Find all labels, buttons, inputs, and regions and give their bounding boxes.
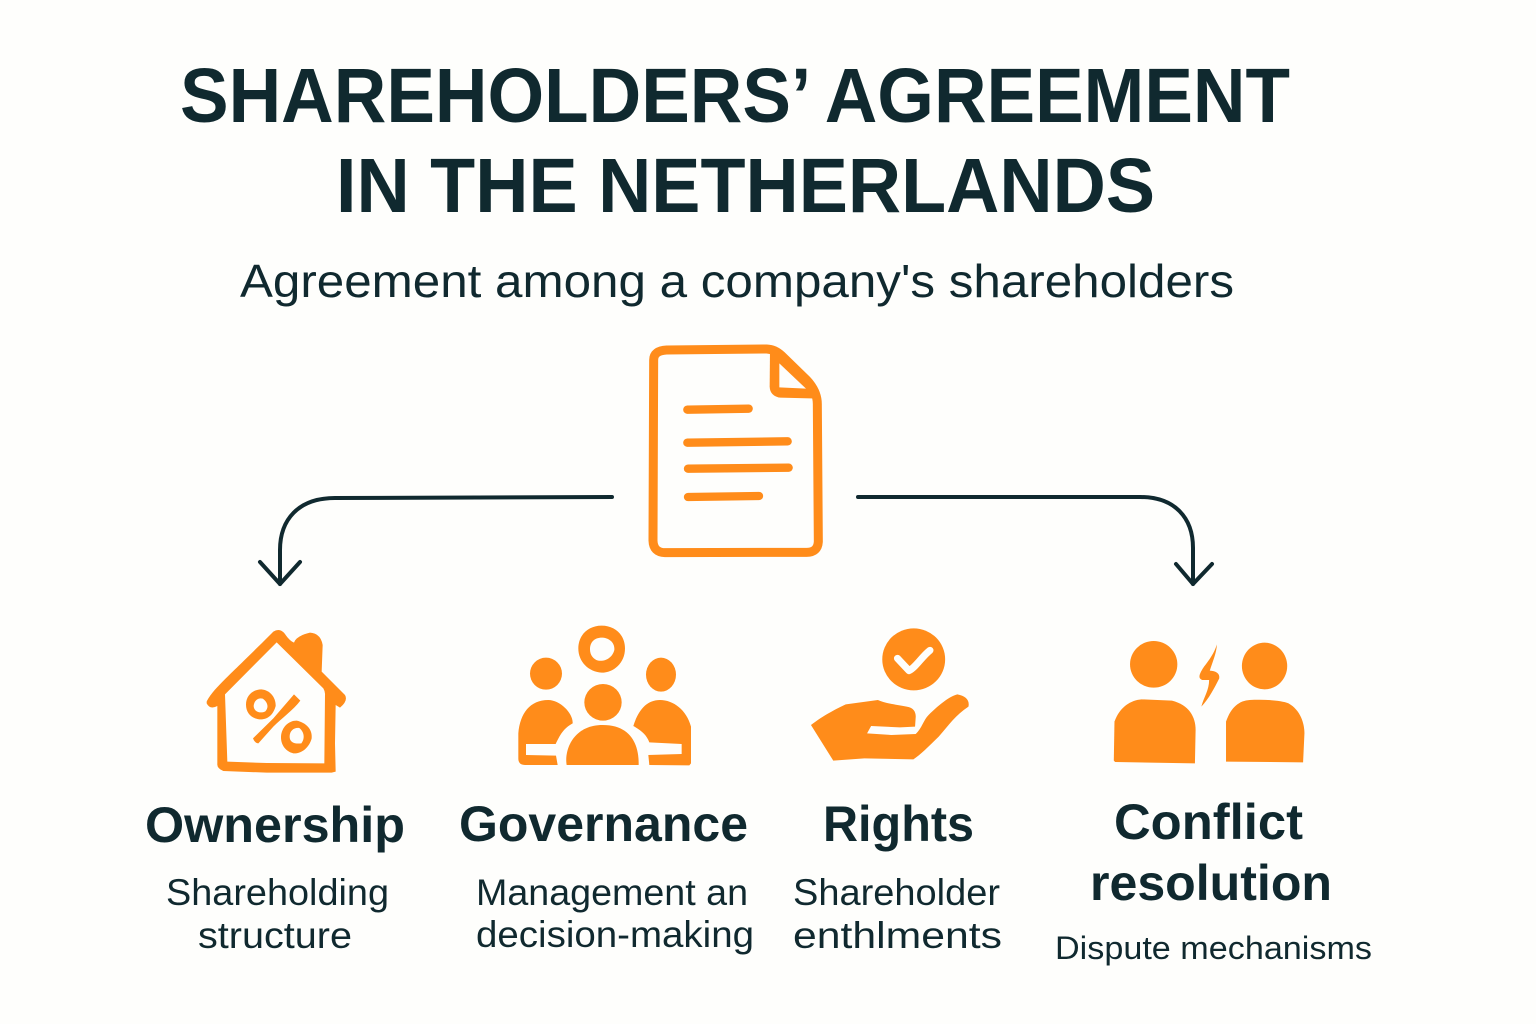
title: SHAREHOLDERS’ AGREEMENT bbox=[180, 53, 1290, 139]
column: governance text: Governance bbox=[459, 796, 748, 852]
arrow: to ownership bbox=[260, 497, 612, 584]
column: conflict resolution text: resolution bbox=[1090, 855, 1332, 911]
arrow: to conflict resolution bbox=[858, 497, 1212, 584]
icon: document bbox=[653, 349, 820, 553]
column: rights text: Rights bbox=[823, 796, 974, 852]
icon: governance group bbox=[518, 626, 691, 765]
column: conflict resolution text bbox=[1055, 794, 1372, 966]
column: ownership text: structure bbox=[198, 915, 352, 956]
column: rights text: Shareholder bbox=[793, 872, 1000, 913]
column: rights text: enthlments bbox=[793, 915, 1002, 956]
icon: two people in conflict bbox=[1114, 641, 1304, 763]
column: conflict resolution text: Conflict bbox=[1114, 794, 1303, 850]
icon: hand with check bbox=[811, 628, 969, 761]
column: governance text bbox=[459, 796, 754, 955]
column: governance text: decision-making bbox=[476, 914, 754, 955]
column: ownership text bbox=[145, 797, 405, 956]
subtitle: Agreement among a company's shareholders bbox=[240, 255, 1234, 307]
column: rights text bbox=[793, 796, 1002, 956]
column: governance text: Management an bbox=[476, 872, 748, 913]
icon: house with percent bbox=[207, 630, 346, 773]
column: conflict resolution text: Dispute mechanisms bbox=[1055, 930, 1372, 966]
title bbox=[180, 53, 1290, 229]
column: ownership text: Shareholding bbox=[166, 872, 389, 913]
column: ownership text: Ownership bbox=[145, 797, 405, 853]
title: IN THE NETHERLANDS bbox=[336, 143, 1155, 229]
